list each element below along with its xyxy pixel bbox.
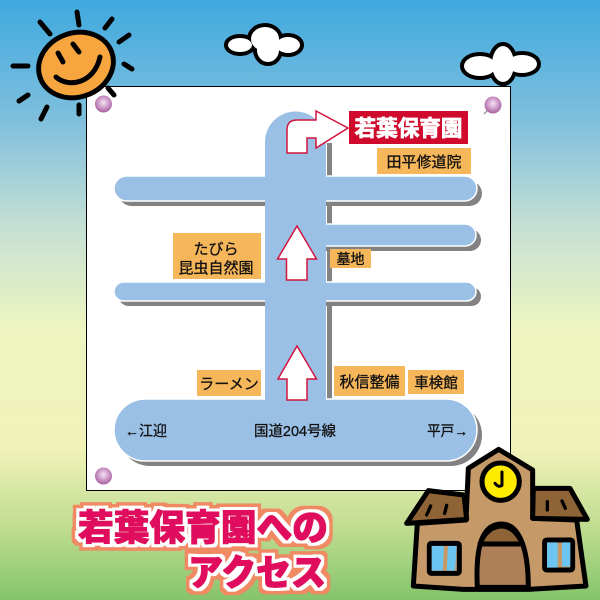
landmark: ラーメン — [197, 370, 261, 396]
road label: 平戸 direction: 平戸→ — [427, 424, 468, 440]
cloud: left — [228, 27, 300, 62]
arrow: turn right to destination — [287, 111, 348, 153]
landmark: 墓地 — [330, 249, 371, 268]
landmark: 田平修道院 — [377, 148, 471, 174]
landmark: 秋信整備 — [334, 366, 405, 396]
icon: school building — [407, 449, 587, 589]
landmark: 墓地: 墓地 — [336, 251, 364, 267]
road shadows — [119, 143, 482, 466]
landmark: 車検館: 車検館 — [414, 375, 458, 392]
landmark: 車検館 — [408, 370, 464, 394]
title: 若葉保育園へのアクセス — [78, 507, 328, 593]
cloud: right — [464, 46, 537, 82]
road label: 江迎 direction: ←江迎 — [125, 423, 167, 440]
title: 若葉保育園へのアクセス: アクセス — [188, 552, 326, 593]
landmark: たびら昆虫自然園 — [173, 233, 261, 279]
pin: bottom left — [95, 468, 112, 484]
landmark: ラーメン: ラーメン — [199, 376, 259, 393]
panel: map card — [86, 86, 510, 490]
arrow: straight middle — [278, 226, 316, 280]
landmark: たびら昆虫自然園: 昆虫自然園 — [178, 260, 254, 277]
icon: smiling sun — [13, 12, 132, 119]
roads — [114, 111, 477, 461]
landmark: 田平修道院: 田平修道院 — [386, 154, 462, 171]
arrow: straight bottom — [278, 346, 316, 400]
landmark: たびら昆虫自然園: たびら — [193, 241, 239, 258]
landmark: 秋信整備: 秋信整備 — [339, 374, 400, 391]
title: 若葉保育園へのアクセス: 若葉保育園への — [78, 507, 328, 548]
road label: 国道204号線: 国道204号線 — [254, 423, 336, 440]
destination label: 若葉保育園: 若葉保育園 — [354, 116, 462, 141]
pin: top right — [484, 96, 502, 114]
pin: top left — [95, 96, 112, 112]
